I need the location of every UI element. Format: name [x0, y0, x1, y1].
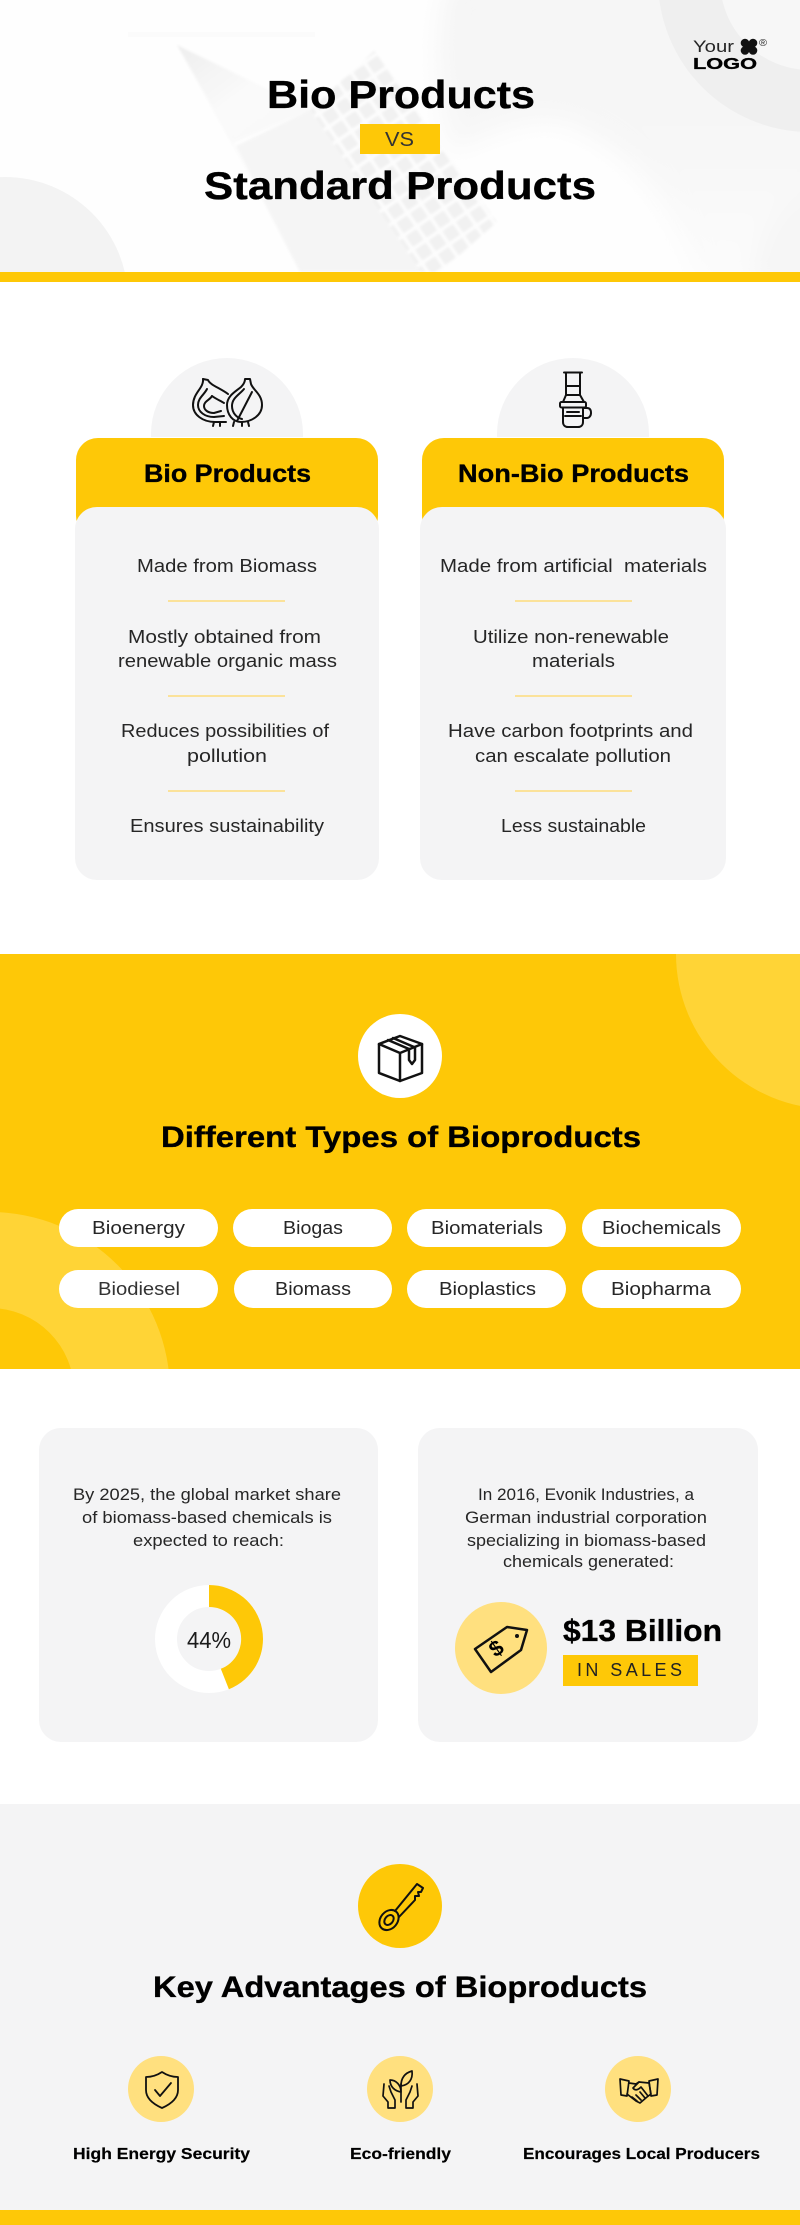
item 2: materials [532, 650, 615, 671]
pill: Biomass [234, 1270, 392, 1308]
panel: Non-Bio Products card [420, 358, 726, 880]
header bottom bar [0, 272, 800, 282]
item 1: Made from Biomass [137, 555, 317, 576]
pill: Biochemicals [582, 1209, 741, 1247]
pill: Biodiesel: Biodiesel [98, 1279, 180, 1299]
decoration: top right circle [676, 954, 800, 1106]
item 1: Made from artificial materials [440, 555, 707, 576]
item 4: Less sustainable [501, 815, 646, 836]
panel: Evonik sales stat [418, 1428, 758, 1742]
item 2 [118, 626, 337, 671]
item 2: Utilize non-renewable [473, 626, 669, 647]
stat text: By 2025, the global market share [73, 1486, 341, 1504]
item 4: Ensures sustainability [130, 815, 325, 836]
item 3: Reduces possibilities of [121, 720, 330, 741]
icon: shield [146, 2072, 178, 2108]
icon circle [455, 1602, 547, 1694]
card header [422, 438, 724, 538]
background: top right ring [658, 0, 800, 132]
donut chart: 44%: 44% [187, 1627, 231, 1653]
pill: Bioenergy [59, 1209, 218, 1247]
stat text: In 2016, Evonik Industries, a [478, 1486, 695, 1504]
title: Bio Products: Bio Products [267, 74, 535, 117]
item 3 [448, 720, 693, 766]
advantage: Eco-friendly [350, 2056, 451, 2163]
stat text [465, 1486, 707, 1571]
pill: Biopharma: Biopharma [611, 1279, 712, 1299]
pill: Biomaterials [407, 1209, 566, 1247]
item 2: renewable organic mass [118, 650, 337, 671]
icon: key [375, 1884, 423, 1934]
background: laptop [177, 45, 497, 272]
VS badge: VS [385, 129, 414, 151]
pill: Bioplastics: Bioplastics [439, 1279, 536, 1299]
sales label [563, 1655, 698, 1686]
background: bottom left circle [0, 177, 124, 272]
icon: box [379, 1036, 422, 1081]
pill: Biopharma [582, 1270, 741, 1308]
advantage: Encourages Local Producers: Encourages Local Producers [523, 2146, 760, 2163]
icon circle [358, 1864, 442, 1948]
advantage: Eco-friendly: Eco-friendly [350, 2146, 451, 2163]
background: faint line [128, 32, 315, 37]
background: hand blobs [460, 0, 660, 29]
logo [693, 37, 768, 73]
VS badge [360, 124, 440, 154]
stat text: specializing in biomass-based [467, 1532, 706, 1550]
pill: Biogas: Biogas [283, 1218, 343, 1238]
item 3: pollution [187, 745, 267, 766]
item 3 [121, 720, 330, 766]
pill: Biomaterials: Biomaterials [431, 1218, 543, 1238]
pill: Bioenergy: Bioenergy [92, 1218, 185, 1238]
icon backdrop semicircle [497, 358, 649, 437]
header panel [0, 0, 800, 272]
donut chart: 44% [166, 1585, 263, 1689]
icon: handshake [620, 2079, 658, 2103]
icon circle [358, 1014, 442, 1098]
pill: Bioplastics [407, 1270, 566, 1308]
stat text: of biomass-based chemicals is [82, 1509, 332, 1527]
section heading: Key Advantages of Bioproducts [153, 1971, 647, 2004]
logo: Your [693, 37, 734, 56]
pill: Biomass: Biomass [275, 1279, 351, 1299]
card body [420, 507, 726, 880]
footer bar [0, 2210, 800, 2225]
card header [76, 438, 378, 538]
item 3: Have carbon footprints and [448, 720, 693, 741]
stat text [73, 1486, 341, 1550]
card heading: Non-Bio Products [458, 460, 689, 488]
icon: onions [193, 379, 262, 426]
card body [75, 507, 379, 880]
item 2 [473, 626, 669, 671]
logo flower mark [741, 39, 757, 55]
pill: Biochemicals: Biochemicals [602, 1218, 721, 1238]
advantage: Encourages Local Producers [523, 2056, 760, 2163]
icon: price tag [475, 1627, 527, 1672]
advantage: High Energy Security: High Energy Security [73, 2146, 250, 2163]
pill: Biodiesel [59, 1270, 218, 1308]
icon: hands with plant [383, 2071, 418, 2108]
icon: coffee press [560, 372, 591, 427]
section heading: Different Types of Bioproducts [161, 1121, 641, 1154]
stat text: expected to reach: [133, 1532, 284, 1550]
logo: ® [759, 38, 768, 49]
decoration: bottom left ring [0, 1212, 168, 1369]
title: Standard Products: Standard Products [204, 165, 596, 208]
item 2: Mostly obtained from [128, 626, 321, 647]
panel: Key Advantages of Bioproducts [0, 1804, 800, 2210]
stat text: chemicals generated: [503, 1553, 674, 1571]
advantage: High Energy Security [73, 2056, 250, 2163]
logo: LOGO [693, 56, 757, 73]
sales label: IN SALES [577, 1660, 682, 1680]
sales value: $13 Billion [563, 1613, 722, 1648]
panel: Different Types of Bioproducts [0, 954, 800, 1369]
item 3: can escalate pollution [475, 745, 671, 766]
stat text: German industrial corporation [465, 1509, 707, 1527]
card heading: Bio Products [144, 460, 311, 488]
icon backdrop semicircle [151, 358, 303, 437]
pill: Biogas [233, 1209, 392, 1247]
panel: Bio Products card [75, 358, 379, 880]
panel: market share stat [39, 1428, 378, 1742]
icon: price tag: $ [484, 1635, 508, 1662]
